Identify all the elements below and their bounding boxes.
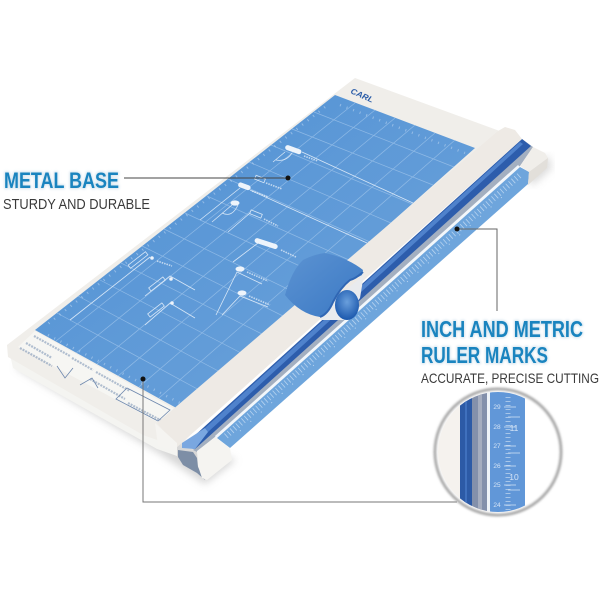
- handle pad: [285, 253, 363, 317]
- blade cover: [182, 428, 208, 449]
- callout: metal base: [3, 168, 290, 213]
- paper trimmer product: [7, 78, 552, 484]
- ruler ticks: [504, 407, 520, 505]
- blue metal mat: [35, 95, 475, 410]
- heading: inch and metric ruler marks: [421, 316, 583, 368]
- leader line: metal base: [124, 176, 290, 180]
- leader line: to magnifier: [140, 376, 457, 502]
- heading: inch and metric ruler marks: RULER MARKS: [421, 342, 548, 368]
- blade handle: [285, 253, 364, 320]
- ruler numbers: 24: [493, 502, 501, 509]
- ruler numbers: 26: [493, 463, 501, 470]
- ruler numbers: 27: [493, 443, 501, 450]
- heading: metal base: METAL BASE: [4, 168, 119, 193]
- ruler numbers: 29: [493, 404, 501, 411]
- ruler numbers: 10: [509, 472, 519, 482]
- paper size markers: [150, 144, 302, 305]
- paper size guide lines: [70, 152, 413, 325]
- ruler numbers: 11: [510, 423, 519, 433]
- wheel housing: [320, 274, 364, 320]
- brand CARL: CARL: [349, 87, 375, 105]
- ruler numbers: 25: [493, 482, 501, 489]
- base top surface: [7, 78, 520, 447]
- blue ruler: [217, 167, 529, 448]
- subheading: sturdy and durable: STURDY AND DURABLE: [3, 196, 150, 213]
- blue cutting channel: [182, 139, 531, 449]
- size labels: [157, 156, 318, 305]
- foot of arm: [155, 423, 177, 453]
- top ruler end cap: [520, 147, 548, 185]
- heading: inch and metric ruler marks: RULER MARKS: [421, 342, 548, 368]
- magnifier detail circle: [435, 389, 561, 515]
- mat grid lines: [56, 103, 455, 398]
- ruler tick marks: [226, 175, 520, 436]
- mat edge ruler ticks: [44, 105, 465, 403]
- clear bracket tip: [178, 450, 205, 480]
- leader line: ruler: [454, 226, 497, 311]
- heading: metal base: METAL BASE: [4, 168, 119, 193]
- ruler numbers: [493, 404, 519, 509]
- gray track: [193, 139, 533, 452]
- soft shadow: [16, 350, 236, 484]
- white rail line: [215, 165, 520, 439]
- cutting arm: [157, 127, 522, 447]
- cutting wheel: [335, 290, 359, 320]
- ruler numbers: 28: [493, 424, 501, 431]
- instruction panel: [18, 331, 178, 425]
- callout: ruler marks: [421, 226, 599, 386]
- lower ruler end cap: [197, 437, 232, 480]
- base front face: [8, 346, 177, 456]
